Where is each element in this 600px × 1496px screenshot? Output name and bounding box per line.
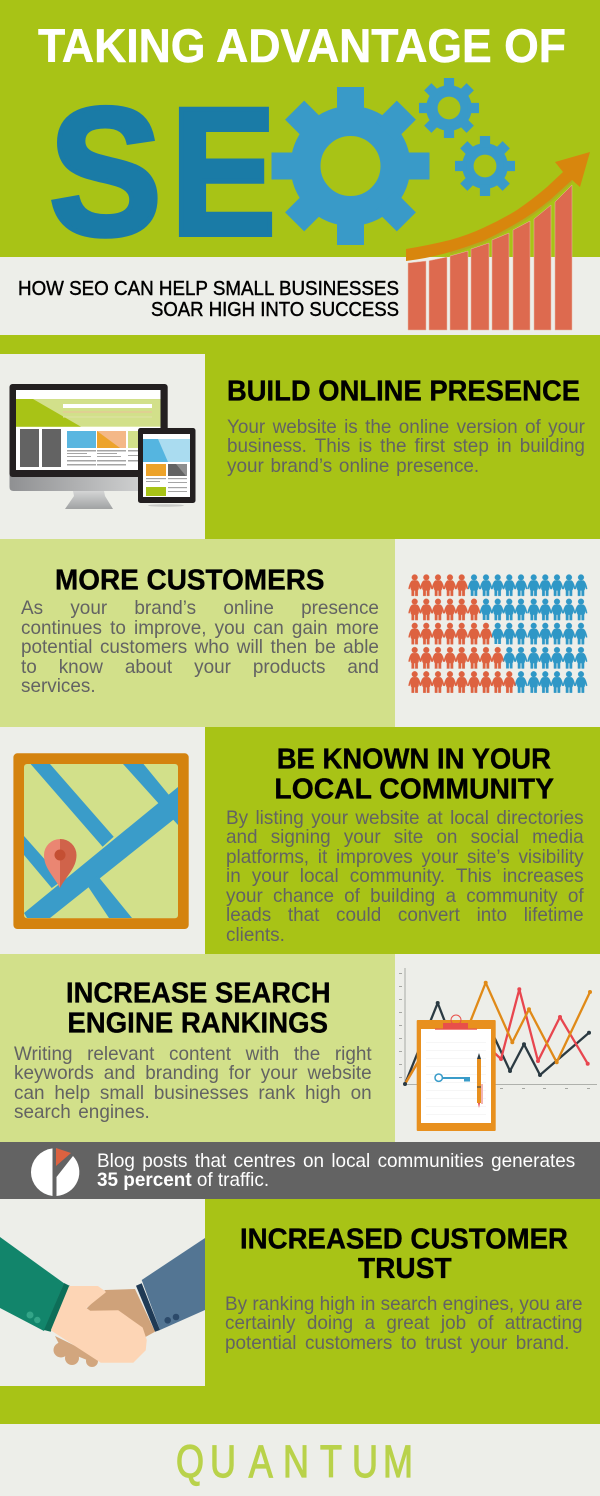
text block xyxy=(97,1150,575,1191)
text block: 35 percent of traffic. xyxy=(97,1169,269,1191)
heading: INCREASED CUSTOMER xyxy=(240,1223,568,1255)
text block xyxy=(14,1042,372,1123)
callout: traffic stat xyxy=(0,1142,600,1199)
icon: handshake xyxy=(0,1199,205,1386)
icon: map with pin xyxy=(0,727,205,954)
heading: LOCAL COMMUNITY xyxy=(274,773,554,805)
title: TAKING ADVANTAGE OF xyxy=(38,19,566,72)
panel: footer xyxy=(0,1424,600,1496)
heading xyxy=(274,743,554,805)
heading xyxy=(66,978,331,1040)
heading: ENGINE RANKINGS xyxy=(67,1008,328,1040)
text block: continues to improve, you can gain more xyxy=(21,617,379,639)
text block: your brand’s online presence. xyxy=(227,454,479,476)
text block: in your local community. This increases xyxy=(226,865,584,887)
logo: Quantum: M xyxy=(383,1436,413,1487)
text block: clients. xyxy=(226,924,285,946)
text block: leads that could convert into lifetime xyxy=(226,904,584,926)
heading: MORE CUSTOMERS xyxy=(55,564,324,596)
icon: pie chart xyxy=(31,1148,80,1196)
panel: customer trust xyxy=(0,1199,600,1424)
subtitle xyxy=(18,277,399,321)
panel: search engine rankings xyxy=(0,954,600,1142)
panel: more customers xyxy=(0,539,600,727)
heading: BE KNOWN IN YOUR xyxy=(277,743,551,775)
SEO wordmark: S xyxy=(49,71,162,274)
logo: Quantum: A xyxy=(249,1436,274,1487)
text block: certainly doing a great job of attracting xyxy=(225,1312,583,1334)
text block: Your website is the online version of your xyxy=(227,416,585,438)
heading: BUILD ONLINE PRESENCE xyxy=(227,376,580,408)
logo: Quantum: Q xyxy=(176,1436,204,1487)
text block: potential customers who will then be able xyxy=(21,636,379,658)
text block: search engines. xyxy=(14,1101,150,1123)
text block: business. This is the first step in building xyxy=(227,435,585,457)
text block: services. xyxy=(21,675,96,697)
text block: By listing your website at local directories xyxy=(226,806,584,828)
text block: Writing relevant content with the right xyxy=(14,1042,372,1064)
text block xyxy=(225,1292,583,1354)
logo: Quantum: N xyxy=(283,1436,309,1487)
logo: Quantum: U xyxy=(352,1436,378,1487)
text block: As your brand’s online presence xyxy=(21,597,379,619)
panel: build online presence xyxy=(0,354,600,539)
text block: Blog posts that centres on local communities generates xyxy=(97,1150,575,1172)
text block: to know about your products and xyxy=(21,656,379,678)
text block: platforms, it improves your site’s visibility xyxy=(226,846,584,868)
heading: TRUST xyxy=(358,1253,452,1285)
heading xyxy=(240,1223,568,1285)
text block xyxy=(227,416,585,476)
SEO wordmark xyxy=(49,71,515,274)
text block: keywords and branding for your website xyxy=(14,1062,372,1084)
icon: line chart and clipboard xyxy=(395,954,600,1142)
icon: crowd of people xyxy=(395,539,600,727)
growth bar chart with arrow xyxy=(406,152,590,330)
subtitle: SOAR HIGH INTO SUCCESS xyxy=(151,298,399,321)
icon: monitor and tablet xyxy=(0,354,205,539)
SEO wordmark: E xyxy=(170,71,276,274)
heading: INCREASE SEARCH xyxy=(66,978,331,1010)
panel: local community xyxy=(0,727,600,954)
logo: Quantum xyxy=(176,1436,413,1487)
text block: and signing your site on social media xyxy=(226,826,584,848)
text block: your chance of building a community of xyxy=(226,884,584,906)
logo: Quantum: U xyxy=(210,1436,236,1487)
panel: header xyxy=(0,0,600,354)
text block xyxy=(21,597,379,697)
subtitle: HOW SEO CAN HELP SMALL BUSINESSES xyxy=(18,277,399,300)
text block: potential customers to trust your brand. xyxy=(225,1332,569,1354)
text block: can help small businesses rank high on xyxy=(14,1082,372,1104)
text block: By ranking high in search engines, you are xyxy=(225,1292,583,1314)
text block xyxy=(226,806,584,946)
logo: Quantum: T xyxy=(320,1436,342,1487)
subtitle band xyxy=(0,257,600,335)
